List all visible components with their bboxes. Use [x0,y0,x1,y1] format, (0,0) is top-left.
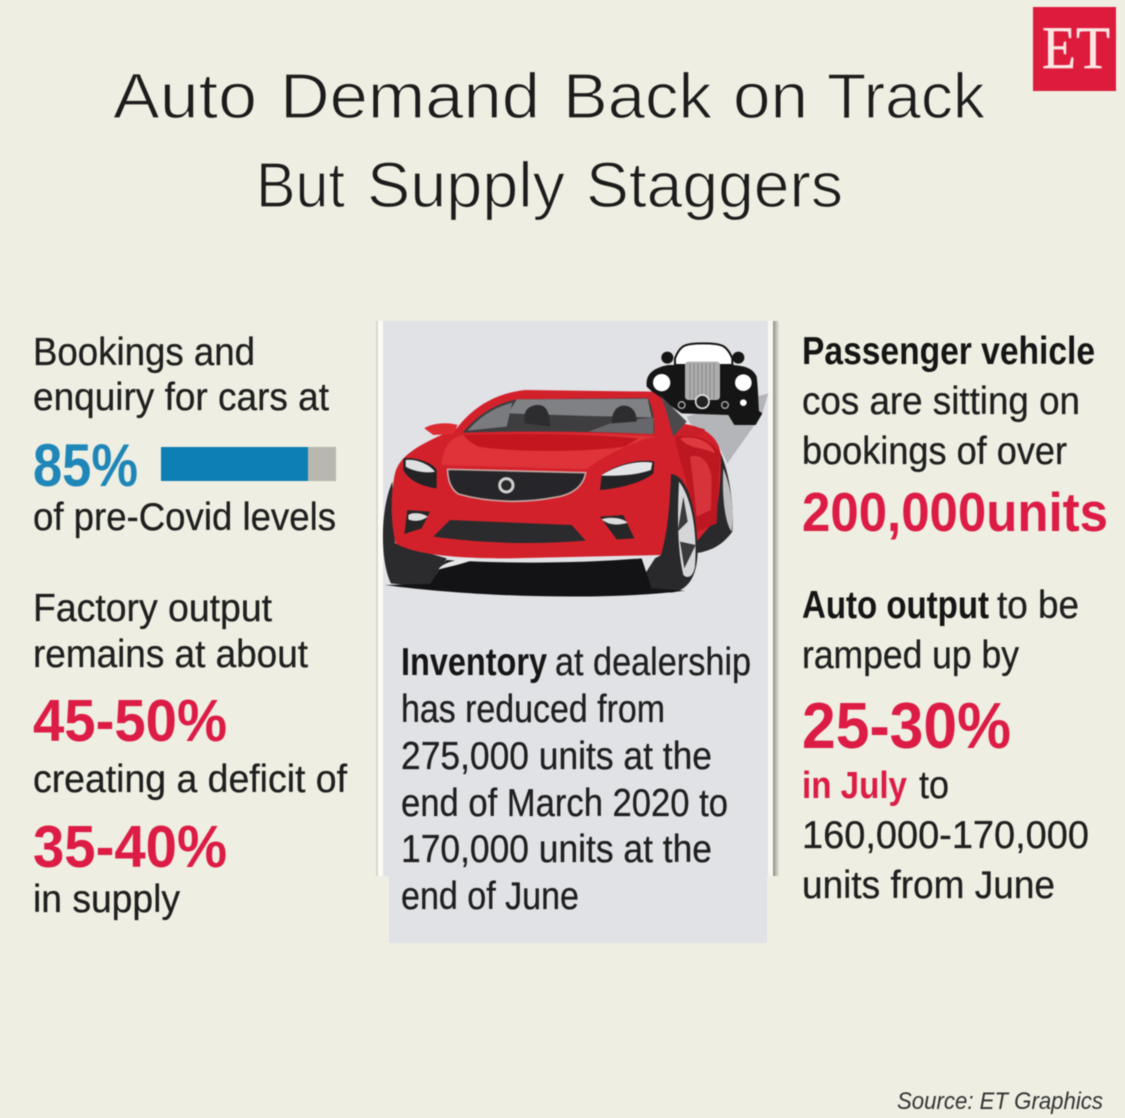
logo: ET: ET [1042,15,1110,81]
stat: 25-30%: 25-30% [802,689,1011,762]
text: inventory at dealership: has reduced from [401,688,665,731]
text: creating a deficit of: creating a deficit of [33,758,347,801]
rear tyre [695,448,733,553]
text: inventory at dealership: at dealership [555,641,751,684]
hood [442,433,657,469]
text: factory output: Factory output [33,587,272,630]
source: Source: ET Graphics [897,1088,1103,1115]
grille [448,469,586,501]
text: auto output: ramped up by [802,634,1019,677]
panel: centre background [376,321,779,943]
text: auto output [802,584,1079,677]
stat: 200,000 units: 200,000units [802,481,1108,543]
windscreen [463,398,654,434]
panel: bookings and output ramp-up [802,330,1108,907]
text: passenger vehicle bookings [802,330,1095,473]
title [113,60,986,221]
text: inventory at dealership: 275,000 units at the [401,735,712,778]
text: of pre-Covid levels: of pre-Covid levels [33,496,336,539]
text: bookings and enquiry [33,331,329,419]
text: inventory at dealership: end of June [401,875,579,918]
text: passenger vehicle bookings: cos are sitting on [802,380,1080,423]
illustration: vintage car and red car [383,343,768,597]
title: Track [827,60,986,132]
text: in July to 160,000-170,000 units from June: 160,000-170,000 [802,814,1089,857]
front tyre [635,474,698,593]
text: in July to 160,000-170,000 units from June [802,764,1089,907]
text: factory output [33,587,308,676]
lower intake [433,520,586,543]
text: passenger vehicle bookings: bookings of over [802,430,1067,473]
stat: 45-50%: 45-50% [33,688,227,754]
logo: ET [1033,7,1116,91]
text: inventory at dealership [401,641,751,918]
title: on [733,60,808,132]
text: inventory at dealership: Inventory [401,641,547,684]
A-pillar [660,395,687,437]
text: auto output: to be [997,584,1079,627]
text: inventory at dealership: end of March 2020 to [401,782,728,825]
title: Staggers [586,149,843,221]
text: in supply: in supply [33,878,180,921]
bar chart: 85 percent of pre-Covid levels [161,447,336,481]
left tyre [383,482,447,588]
underbody and ground shadow [385,558,685,597]
text: auto output: Auto output [802,584,989,627]
text: in July to 160,000-170,000 units from June: in July [802,765,907,807]
title: Auto [113,60,257,132]
icon: red car [383,390,733,597]
text: inventory at dealership: 170,000 units at the [401,828,712,871]
body [392,390,721,558]
text: factory output: remains at about [33,633,308,676]
title: Demand [280,60,540,132]
text: in July to 160,000-170,000 units from June: to [919,764,949,807]
mirrors [424,423,458,435]
panel: bookings and factory output [33,331,347,921]
text: bookings and enquiry: enquiry for cars at [33,376,329,419]
text: bookings and enquiry: Bookings and [33,331,255,374]
text: in July to 160,000-170,000 units from June: units from June [802,864,1055,907]
headlights [403,458,437,488]
icon: vintage car [647,343,768,463]
title: Back [563,60,713,132]
side panel [675,435,720,533]
title: But [256,149,345,221]
title: Supply [367,149,565,221]
fog lights [404,510,430,534]
stat: 85%: 85% [33,432,138,499]
stat: 35-40%: 35-40% [33,814,227,880]
